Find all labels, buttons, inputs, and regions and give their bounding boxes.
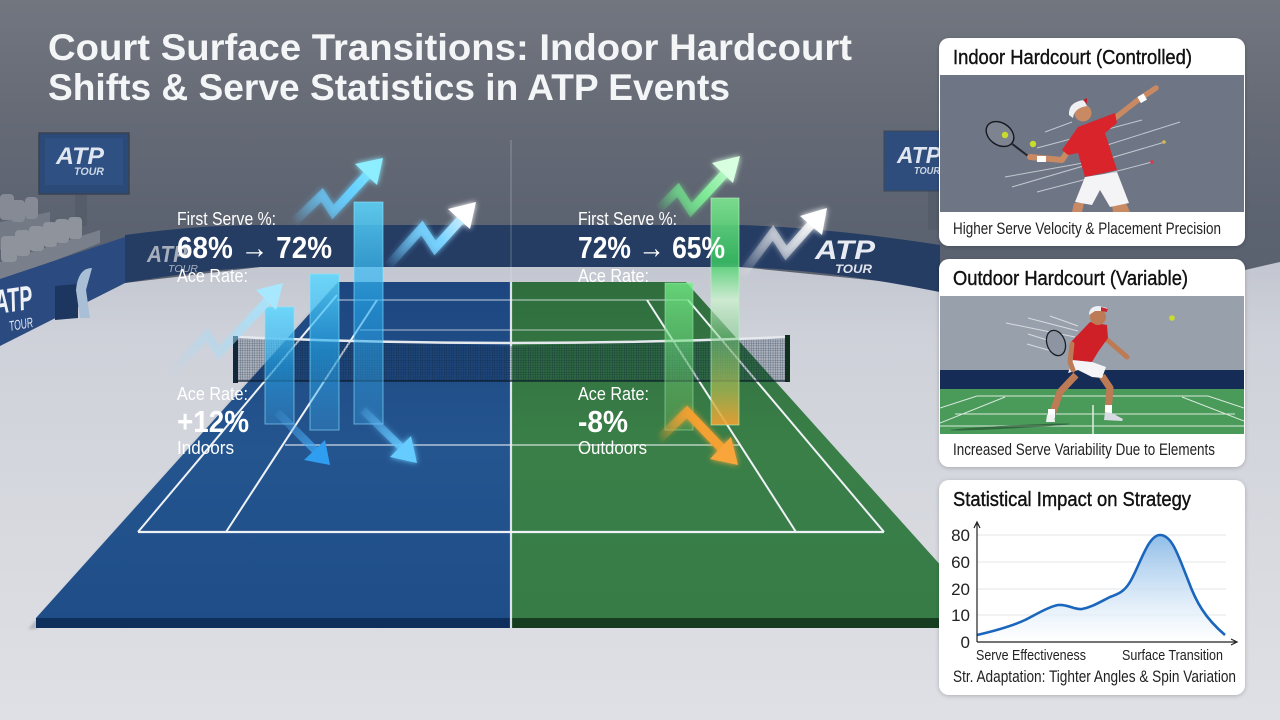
image: player outdoors [940,296,1244,434]
bleachers [0,194,100,282]
line chart: Surface Transition [1122,647,1223,664]
title: Court Surface Transitions: Indoor Hardcourt [48,27,852,68]
stats: outdoor: Ace Rate: [578,384,649,404]
court lines [138,140,884,628]
sponsor wall: back band: ATP [146,241,188,267]
stats: outdoor [578,209,725,458]
image: player serving indoors [940,75,1244,212]
scoreboard: right: ATP [896,142,942,168]
arrow: outdoor up green [658,156,740,210]
arrow: outdoor down orange [658,412,738,465]
line chart: 80 [951,526,970,545]
sponsor wall: back band: TOUR [835,262,872,276]
arrow: indoor up large [293,158,383,223]
stats: indoor: Ace Rate: [177,266,248,286]
stats: indoor: 68% → 72% [177,230,332,265]
panel: outdoor hardcourt [939,259,1245,467]
panel heading: statistical: Statistical Impact on Strategy [953,488,1192,511]
sponsor wall: back band [125,225,940,292]
court: green outdoor side [511,282,988,628]
stats: outdoor: 72% → 65% [578,230,725,265]
panel heading: outdoor: Outdoor Hardcourt (Variable) [953,267,1188,290]
line chart: 0 [961,633,970,652]
title [48,27,852,108]
sponsor wall: back band: ATP [814,235,876,265]
panel heading: indoor: Indoor Hardcourt (Controlled) [953,46,1192,69]
arrow: indoor down left [277,412,330,465]
stats: outdoor: -8% [578,404,628,439]
tennis net [233,335,790,383]
stats: indoor: +12% [177,404,249,439]
sponsor wall: left side: TOUR [8,314,34,334]
caption: indoor: Higher Serve Velocity & Placement Precision [953,220,1221,238]
scoreboard: right [884,131,944,230]
panel: indoor hardcourt [939,38,1245,246]
bar chart: outdoor bars [665,198,739,430]
arrow: indoor up small [167,283,283,377]
scoreboard: left: ATP [55,143,105,170]
bar chart: indoor bars [265,202,383,430]
line chart: 10 [951,606,970,625]
scoreboard: left: TOUR [74,166,104,178]
sponsor wall: back band: TOUR [168,264,198,275]
stats: outdoor: Outdoors [578,438,647,458]
stats: outdoor: Ace Rate: [578,266,649,286]
arrow: outdoor up white [740,208,827,277]
line chart [951,522,1237,664]
arrow: indoor down right [363,410,417,463]
scoreboard: right: TOUR [914,166,941,177]
stats: indoor: Indoors [177,438,234,458]
caption: outdoor: Increased Serve Variability Due to Elements [953,441,1215,459]
line chart: 20 [951,580,970,599]
panel: statistical impact [939,480,1245,695]
stats: outdoor: First Serve %: [578,209,677,229]
court: blue indoor side [28,282,511,629]
title: Shifts & Serve Statistics in ATP Events [48,67,730,108]
arrow: indoor up right [387,202,476,267]
scoreboard: left [39,133,129,226]
stats: indoor: First Serve %: [177,209,276,229]
stats: indoor: Ace Rate: [177,384,248,404]
line chart: Serve Effectiveness [976,647,1086,664]
stats: indoor [177,209,332,458]
sponsor wall: left side [0,237,125,346]
line chart: 60 [951,553,970,572]
